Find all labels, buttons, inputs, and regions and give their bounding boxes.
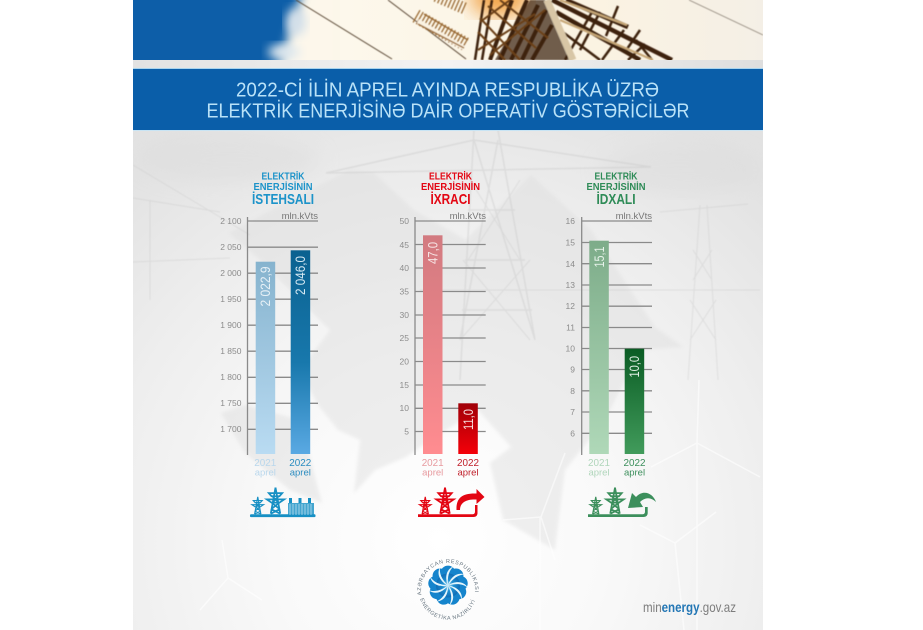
bar chart: export: 50 xyxy=(400,216,409,226)
website: minenergy.gov.az xyxy=(643,599,736,615)
heading: import xyxy=(586,170,646,208)
bar chart: import: 11 xyxy=(566,322,575,332)
bar: 2022: 2 046,0 xyxy=(293,256,308,295)
bar chart: production: 2 100 xyxy=(220,216,242,226)
heading: import: İDXALI xyxy=(596,191,636,208)
panel background xyxy=(133,130,763,630)
logo xyxy=(417,559,479,620)
icon: pylons and power plant xyxy=(250,488,316,517)
wires xyxy=(296,0,763,59)
bar chart: export: 10 xyxy=(400,403,409,413)
bar chart: export: 30 xyxy=(400,310,409,320)
bar chart: production: 2022 xyxy=(289,458,312,469)
bar chart: import: 6 xyxy=(570,428,575,438)
light strip xyxy=(133,60,763,69)
bar chart: import: aprel xyxy=(624,468,645,478)
bar: 2021: 47,0 xyxy=(426,242,440,264)
heading: export xyxy=(421,170,480,208)
icon: pylons with import arrow xyxy=(588,488,656,517)
heading: production: ENERJİSİNİN xyxy=(254,180,312,193)
bar chart: production: 2 050 xyxy=(220,242,242,252)
heading: production: ELEKTRİK xyxy=(262,170,305,182)
bar chart: export: aprel xyxy=(422,468,443,478)
bar chart: import: aprel xyxy=(588,468,610,478)
bar chart: production: 1 900 xyxy=(220,320,242,330)
bar chart: export: 5 xyxy=(404,426,409,436)
bar chart: production xyxy=(220,211,318,478)
bar chart: import: 12 xyxy=(566,301,575,311)
emblem ring text: ENERGETİKA NAZİRLİYİ xyxy=(420,598,475,620)
background illustration xyxy=(133,130,760,630)
emblem ring text: AZƏRBAYCAN RESPUBLİKASI xyxy=(417,559,479,595)
heading: production xyxy=(252,170,314,208)
bar chart: import: 10 xyxy=(566,344,575,354)
bar chart: import: 2022 xyxy=(624,458,646,469)
insulators xyxy=(416,0,468,48)
bar chart: import: 15 xyxy=(566,238,575,248)
bar chart: export: 25 xyxy=(400,333,409,343)
bar: 2022 xyxy=(458,403,478,454)
bar chart: production: 1 800 xyxy=(220,372,242,382)
heading: import: ELEKTRİK xyxy=(594,170,638,182)
bar: 2021 xyxy=(423,235,442,454)
bar: 2022 xyxy=(291,250,310,454)
emblem swirl xyxy=(427,565,469,607)
bar chart: production: 1 750 xyxy=(220,398,242,408)
tower lattice xyxy=(475,0,672,60)
title: ELEKTRİK ENERJİSİNƏ DAİR OPERATİV GÖSTƏRİCİLƏR xyxy=(206,100,690,122)
panel: import xyxy=(566,170,656,517)
ghost turbines xyxy=(506,380,760,546)
heading: production: İSTEHSALI xyxy=(252,191,314,208)
bar chart: export: 35 xyxy=(400,286,409,296)
bar chart: import: 16 xyxy=(566,216,575,226)
bar chart: import: mln.kVts xyxy=(616,211,652,222)
bar chart: import: 13 xyxy=(566,280,575,290)
icon: pylons with export arrow xyxy=(418,488,484,517)
heading: export: İXRACI xyxy=(430,191,470,208)
bar chart: export: mln.kVts xyxy=(450,211,486,222)
bar chart: export: 2022 xyxy=(457,458,479,469)
bar chart: production: 1 700 xyxy=(220,424,242,434)
heading: export: ELEKTRİK xyxy=(429,170,473,182)
bar chart: production: mln.kVts xyxy=(282,211,318,222)
bar chart: production: 2021 xyxy=(254,458,277,469)
bar chart: export: 15 xyxy=(400,380,409,390)
bar: 2022: 10,0 xyxy=(627,356,642,378)
heading: export: ENERJİSİNİN xyxy=(421,180,480,193)
ghost pylons xyxy=(133,130,760,380)
infographic xyxy=(133,0,763,630)
bar chart: import: 9 xyxy=(570,364,575,374)
title: 2022-Cİ İLİN APREL AYINDA RESPUBLİKA ÜZRƏ xyxy=(236,78,659,102)
bar chart: export: 40 xyxy=(400,263,409,273)
bar: 2021 xyxy=(589,241,609,454)
bar chart: production: aprel xyxy=(290,468,311,478)
bar chart: import: 7 xyxy=(570,407,575,417)
bar chart: import xyxy=(566,211,652,478)
bar chart: export: 45 xyxy=(400,240,409,250)
panel: export xyxy=(400,170,486,517)
bar: 2021: 2 022,9 xyxy=(258,266,273,306)
heading: import: ENERJİSİNİN xyxy=(586,180,646,193)
bar: 2022 xyxy=(625,349,644,454)
panel: production xyxy=(220,170,318,517)
map silhouette xyxy=(276,221,674,548)
bar chart: production: 1 950 xyxy=(220,294,242,304)
clouds xyxy=(273,0,763,60)
bar chart: export: 2021 xyxy=(422,458,444,469)
bar: 2021: 15,1 xyxy=(592,246,607,268)
bar chart: export xyxy=(400,211,486,478)
title xyxy=(206,78,690,122)
bar chart: production: 1 850 xyxy=(220,346,242,356)
bar: 2021 xyxy=(256,262,275,454)
emblem ring text xyxy=(417,559,479,620)
title band xyxy=(133,68,763,131)
bar chart: production: aprel xyxy=(255,468,276,478)
top photo xyxy=(133,0,763,60)
bar chart: import: 8 xyxy=(570,386,575,396)
bar chart: export: 20 xyxy=(400,356,409,366)
bar chart: production: 2 000 xyxy=(220,268,242,278)
bar chart: import: 14 xyxy=(566,259,575,269)
bar chart: import: 2021 xyxy=(588,458,610,469)
bar: 2022: 11,0 xyxy=(461,409,476,430)
bar chart: export: aprel xyxy=(457,468,479,478)
